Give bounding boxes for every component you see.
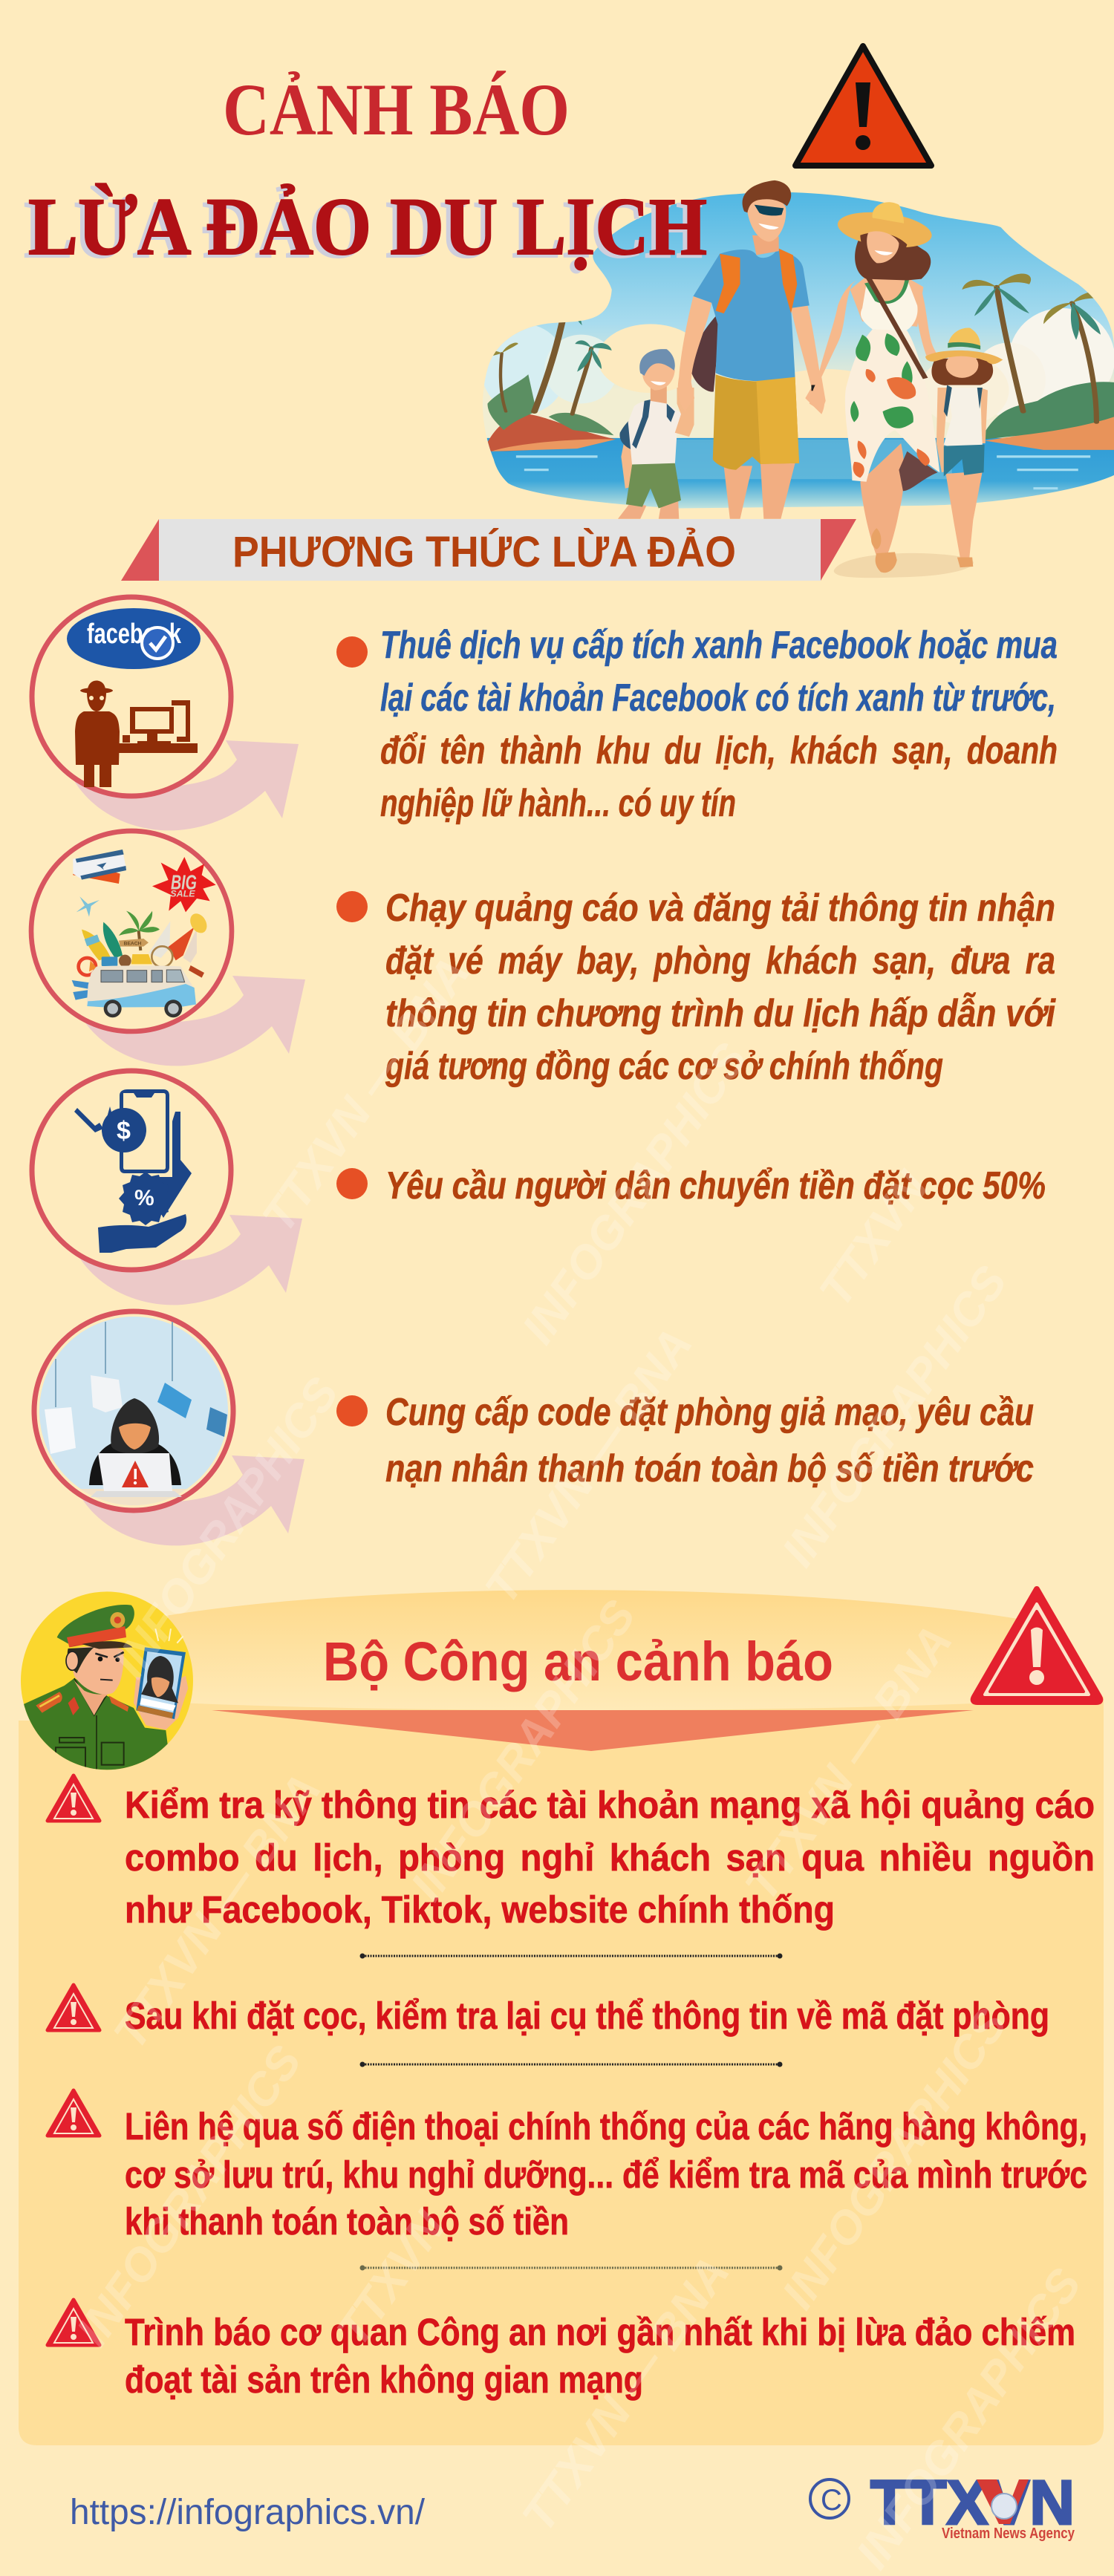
text: INFOGRAPHICS bbox=[104, 1369, 348, 1687]
text: INFOGRAPHICS bbox=[67, 2037, 311, 2355]
warning item 3: khi thanh toán toàn bộ số tiền bbox=[125, 2200, 569, 2243]
logo: copyright and TTXVN: C bbox=[821, 2484, 842, 2517]
officer head bbox=[57, 1605, 134, 1695]
text: TTXVN — BNA bbox=[512, 2248, 740, 2541]
beach gear: BEACH bbox=[124, 942, 142, 947]
logo: copyright and TTXVN: Vietnam News Agency bbox=[942, 2526, 1075, 2542]
text block 1 bbox=[380, 624, 1058, 825]
text: INFOGRAPHICS bbox=[772, 2000, 1017, 2318]
hooded hacker bbox=[89, 1398, 182, 1497]
icon circle 1: fake verified Facebook account bbox=[32, 597, 231, 796]
title line: CẢNH BÁO: CẢNH BÁO bbox=[223, 68, 570, 151]
arrow 1 bbox=[71, 740, 299, 830]
warning item 4 bbox=[48, 2300, 1075, 2401]
figure: girl bbox=[925, 328, 1003, 567]
text: INFOGRAPHICS bbox=[401, 1591, 645, 1910]
ticket bbox=[73, 850, 126, 884]
officer phone bbox=[134, 1628, 188, 1729]
bullet 1 bbox=[336, 636, 368, 668]
text: TTXVN — BNA bbox=[104, 1765, 331, 2058]
arrow 2 bbox=[78, 976, 305, 1066]
icon circle 3: money transfer: $ bbox=[117, 1117, 131, 1145]
illustration: family on the beach bbox=[475, 178, 1114, 578]
title line: LỪA ĐẢO DU LỊCH: LỪA ĐẢO DU LỊCH bbox=[28, 181, 707, 272]
text block 2 bbox=[385, 887, 1056, 1088]
icon: warning triangle bbox=[48, 1776, 100, 1821]
figure: father bbox=[678, 180, 824, 519]
palm trees bbox=[501, 276, 1096, 422]
icon: police officer with phone bbox=[21, 1591, 193, 1780]
van bbox=[87, 965, 196, 1017]
text: INFOGRAPHICS bbox=[512, 1034, 757, 1353]
source link: https://infographics.vn/ bbox=[70, 2493, 426, 2532]
figure: boy bbox=[618, 349, 694, 519]
text: TTXVN — BNA bbox=[475, 1320, 703, 1613]
down arrow under heading bbox=[212, 1710, 974, 1751]
text: TTXVN — BNA bbox=[735, 1617, 962, 1910]
arrow 3 bbox=[75, 1215, 302, 1305]
warning triangle icon: top bbox=[795, 46, 931, 166]
icon circle 1: fake verified Facebook account: facebook bbox=[87, 619, 182, 650]
starburst: big sale bbox=[152, 857, 216, 912]
figure: mother bbox=[810, 202, 939, 573]
text block 1: nghiệp lữ hành... có uy tín bbox=[380, 782, 736, 825]
icon circle 3: money transfer bbox=[32, 1071, 231, 1270]
title line shadow: LỪA ĐẢO DU LỊCH bbox=[24, 184, 703, 275]
icon circle 4: phishing hacker bbox=[30, 1311, 238, 1511]
header lens bbox=[111, 1590, 1104, 1711]
icon: warning triangle bbox=[48, 1985, 100, 2030]
arrow 4 bbox=[77, 1455, 304, 1545]
title bbox=[24, 68, 707, 275]
heading: Bộ Công an cảnh báo: Bộ Công an cảnh báo bbox=[323, 1631, 833, 1692]
logo: copyright and TTXVN: TTXVN bbox=[870, 2468, 1075, 2537]
heading banner: PHƯƠNG THỨC LỪA ĐẢO: PHƯƠNG THỨC LỪA ĐẢO bbox=[232, 528, 736, 576]
sand shadow under the family bbox=[834, 553, 974, 578]
text: TTXVN — BNA bbox=[253, 948, 480, 1242]
hooked documents bbox=[45, 1375, 227, 1454]
text: TTXVN bbox=[810, 1162, 939, 1316]
text: INFOGRAPHICS bbox=[772, 1257, 1017, 1576]
icon: big warning triangle bbox=[974, 1589, 1100, 1702]
heading banner: PHƯƠNG THỨC LỪA ĐẢO bbox=[121, 519, 856, 581]
small plane bbox=[76, 896, 100, 917]
icon circle 3: money transfer: % bbox=[134, 1186, 154, 1210]
warning item 3 bbox=[48, 2090, 1087, 2243]
bullet 2 bbox=[336, 891, 368, 922]
icon circle 2: tour bargain with van bbox=[31, 831, 232, 1031]
text: INFOGRAPHICS bbox=[847, 2260, 1091, 2576]
warning item 1 bbox=[48, 1776, 1095, 1931]
text block 4 bbox=[385, 1391, 1034, 1490]
warning item 4: đoạt tài sản trên không gian mạng bbox=[125, 2358, 643, 2401]
bullet 4 bbox=[336, 1395, 368, 1426]
starburst: big sale: SALE bbox=[170, 888, 196, 899]
bullet 3 bbox=[336, 1168, 368, 1199]
beach gear bbox=[72, 910, 210, 1000]
starburst: big sale: BIG bbox=[171, 870, 197, 893]
beach scene blob bbox=[475, 178, 1114, 509]
icon: warning triangle bbox=[48, 2090, 100, 2136]
text block 2: giá tương đồng các cơ sở chính thống bbox=[385, 1045, 943, 1088]
panel: police warning bbox=[19, 1590, 1104, 2445]
icon: warning triangle bbox=[48, 2300, 100, 2345]
desk bbox=[81, 1489, 186, 1505]
text: TTXVN bbox=[327, 2202, 456, 2355]
warning item 1: như Facebook, Tiktok, website chính thống bbox=[125, 1888, 835, 1931]
